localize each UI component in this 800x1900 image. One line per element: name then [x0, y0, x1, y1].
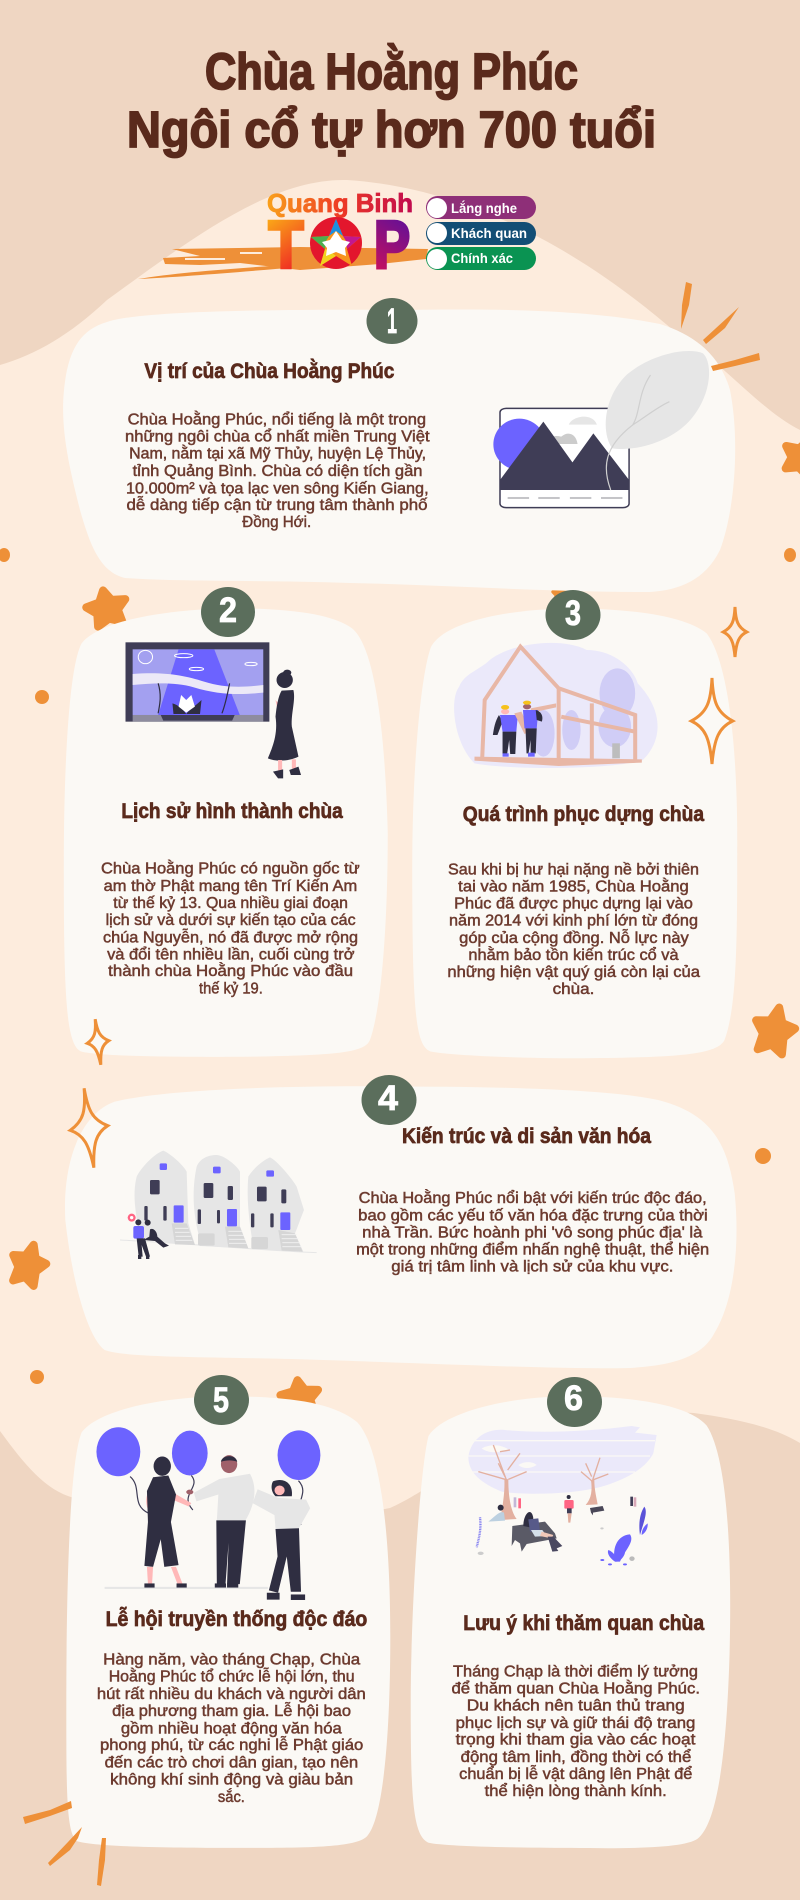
panel 4: architecture — [65, 1075, 737, 1368]
decorative orange brush strokes — [23, 282, 760, 1886]
panel 3: restoration — [412, 590, 737, 1058]
body text 3: năm 2014 với kinh phí lớn từ đóng — [449, 913, 698, 930]
panel 4 background — [65, 1086, 737, 1368]
body text 1 — [125, 409, 430, 531]
body text 2: chúa Nguyễn, nó đã được mở rộng — [103, 927, 358, 946]
body text 6: Tháng Chạp là thời điểm lý tưởng — [453, 1662, 698, 1680]
body text 3: chùa. — [553, 981, 594, 998]
logo: Quang Binh TOP — [138, 188, 536, 282]
body text 4: Chùa Hoằng Phúc nổi bật với kiến trúc độc đáo, — [359, 1188, 707, 1207]
logo P letter: P — [374, 208, 410, 282]
body text 2: từ thế kỷ 13. Qua nhiều giai đoạn — [113, 895, 348, 912]
panel 3 background — [412, 608, 737, 1058]
body text 5: địa phương tham gia. Lễ hội bao — [112, 1701, 351, 1720]
panel 1: location — [63, 298, 735, 592]
body text 2: Chùa Hoằng Phúc có nguồn gốc từ — [101, 859, 360, 878]
body text 1: những ngôi chùa cổ nhất miền Trung Việt — [125, 428, 430, 446]
body text 5 — [97, 1651, 366, 1806]
body text 2: thế kỷ 19. — [199, 980, 263, 997]
number badge 5 — [194, 1375, 249, 1425]
heading 5: Lễ hội truyền thống độc đáo — [106, 1607, 367, 1631]
illustration: landscape picture with leaf — [493, 351, 709, 508]
number badge 1: 1 — [387, 302, 397, 341]
body text 4: nhà Trần. Bức hoành phi 'vô song phúc địa' là — [362, 1224, 703, 1241]
body text 6: để thăm quan Chùa Hoằng Phúc. — [452, 1678, 700, 1697]
woman left — [154, 1457, 171, 1476]
body text 1: tỉnh Quảng Bình. Chùa có diện tích gần — [133, 463, 422, 480]
body text 5: Hàng năm, vào tháng Chạp, Chùa — [103, 1651, 360, 1668]
body text 4: giá trị tâm linh và lịch sử của khu vực. — [391, 1259, 673, 1276]
number badge 3 — [546, 590, 600, 640]
body text 3 — [447, 861, 700, 998]
worker left — [493, 715, 503, 735]
number badge 5: 5 — [213, 1381, 229, 1420]
body text 5: phong phú, từ các nghi lễ Phật giáo — [100, 1735, 363, 1754]
logo T letter: T — [268, 208, 304, 282]
body text 2 — [101, 859, 360, 997]
body text 6: chuẩn bị lễ vật dâng lên Phật để — [459, 1764, 692, 1783]
body text 4: một trong những điểm nhấn nghệ thuật, thể hiện — [356, 1241, 709, 1259]
body text 5: không khí sinh động và giàu bản — [110, 1772, 353, 1789]
body text 2: thành chùa Hoằng Phúc vào đầu — [108, 961, 353, 980]
number badge 6: 6 — [564, 1379, 583, 1418]
heading 6: Lưu ý khi thăm quan chùa — [463, 1612, 704, 1635]
worker right — [523, 710, 538, 728]
illustration: workers building a frame house — [454, 643, 658, 768]
title: Chùa Hoằng Phúc — [205, 42, 578, 100]
illustration: three people with balloons — [96, 1427, 320, 1600]
number badge 4: 4 — [378, 1079, 399, 1118]
body text 1: 10.000m² và tọa lạc ven sông Kiến Giang, — [126, 480, 429, 497]
woman right — [272, 1480, 292, 1496]
heading 1: Vị trí của Chùa Hoằng Phúc — [144, 359, 395, 383]
number badge 6 — [547, 1377, 602, 1427]
decorative orange stars and dots — [0, 434, 800, 1415]
body text 5: hút rất nhiều du khách và người dân — [97, 1686, 366, 1703]
body text 6 — [452, 1662, 700, 1800]
body text 2: am thờ Phật mang tên Trí Kiến Am — [104, 878, 357, 895]
body text 5: gồm nhiều hoạt động văn hóa — [121, 1720, 342, 1737]
decorative orange sparkles — [65, 607, 747, 1170]
body text 3: những hiện vật quý giá còn lại của — [447, 964, 700, 981]
heading 4: Kiến trúc và di sản văn hóa — [402, 1125, 651, 1148]
pill: Chính xác: Chính xác — [451, 250, 513, 266]
body text 3: tai vào năm 1985, Chùa Hoằng — [458, 877, 689, 896]
pill: Lắng nghe: Lắng nghe — [451, 199, 517, 216]
heading 3: Quá trình phục dựng chùa — [463, 803, 704, 826]
pill: Khách quan — [426, 222, 536, 245]
body text 2: và đổi tên nhiều lần, cuối cùng trở — [107, 945, 355, 963]
body text 2: lịch sử và dưới sự kiến tạo của các — [106, 912, 356, 929]
man centre — [221, 1455, 237, 1473]
illustration: woman viewing painting — [126, 642, 301, 778]
body text 3: Phúc đã được phục dựng lại vào — [454, 896, 693, 913]
heading 2: Lịch sử hình thành chùa — [121, 800, 343, 823]
body text 6: Du khách nên tuân thủ trang — [467, 1698, 685, 1714]
body text 4: bao gồm các yếu tố văn hóa đặc trưng của thời — [358, 1207, 708, 1224]
illustration: people in a park — [468, 1426, 657, 1565]
body text 3: Sau khi bị hư hại nặng nề bởi thiên — [448, 861, 699, 878]
body text 6: trọng khi tham gia vào các hoạt — [456, 1732, 696, 1749]
body text 6: động tâm linh, đồng thời có thể — [461, 1748, 691, 1766]
panel 6: visiting notes — [411, 1377, 730, 1848]
panel 6 background — [411, 1396, 730, 1848]
panel 2: history — [64, 587, 388, 1057]
body text 6: phục lịch sự và giữ thái độ trang — [456, 1715, 695, 1732]
panel 5 background — [66, 1396, 390, 1848]
title — [127, 42, 656, 158]
panel 1 background — [63, 310, 735, 592]
logo wordmark: Quang Binh — [267, 188, 413, 218]
number badge 4 — [362, 1075, 416, 1125]
body text 6: thể hiện lòng thành kính. — [485, 1782, 667, 1800]
pill: Chính xác — [426, 247, 536, 270]
body text 3: góp của cộng đồng. Nỗ lực này — [459, 928, 689, 947]
title: Ngôi cổ tự hơn 700 tuổi — [127, 101, 656, 158]
body text 1: Đồng Hới. — [242, 514, 311, 531]
icon: orange brush stroke — [138, 247, 428, 279]
body text 5: đến các trò chơi dân gian, tạo nên — [105, 1754, 358, 1771]
number badge 1 — [366, 298, 418, 344]
number badge 2 — [201, 587, 255, 637]
pill: Khách quan: Khách quan — [451, 225, 527, 241]
body text 1: Chùa Hoằng Phúc, nổi tiếng là một trong — [128, 409, 426, 428]
body text 1: Nam, nằm tại xã Mỹ Thủy, huyện Lệ Thủy, — [129, 444, 426, 463]
body text 5: sắc. — [218, 1787, 245, 1806]
body text 4 — [356, 1188, 709, 1276]
body text 3: nhằm bảo tồn kiến trúc cổ và — [468, 945, 679, 964]
body text 5: Hoằng Phúc tổ chức lễ hội lớn, thu — [109, 1667, 355, 1686]
logo star badge — [310, 217, 362, 269]
number badge 2: 2 — [219, 591, 237, 630]
pill: Lắng nghe — [426, 196, 536, 219]
panel 5: festival — [66, 1375, 390, 1848]
number badge 3: 3 — [565, 594, 581, 633]
illustration: three houses with two people — [120, 1151, 317, 1259]
body text 1: dễ dàng tiếp cận từ trung tâm thành phố — [126, 495, 428, 514]
panel 2 background — [64, 608, 388, 1057]
